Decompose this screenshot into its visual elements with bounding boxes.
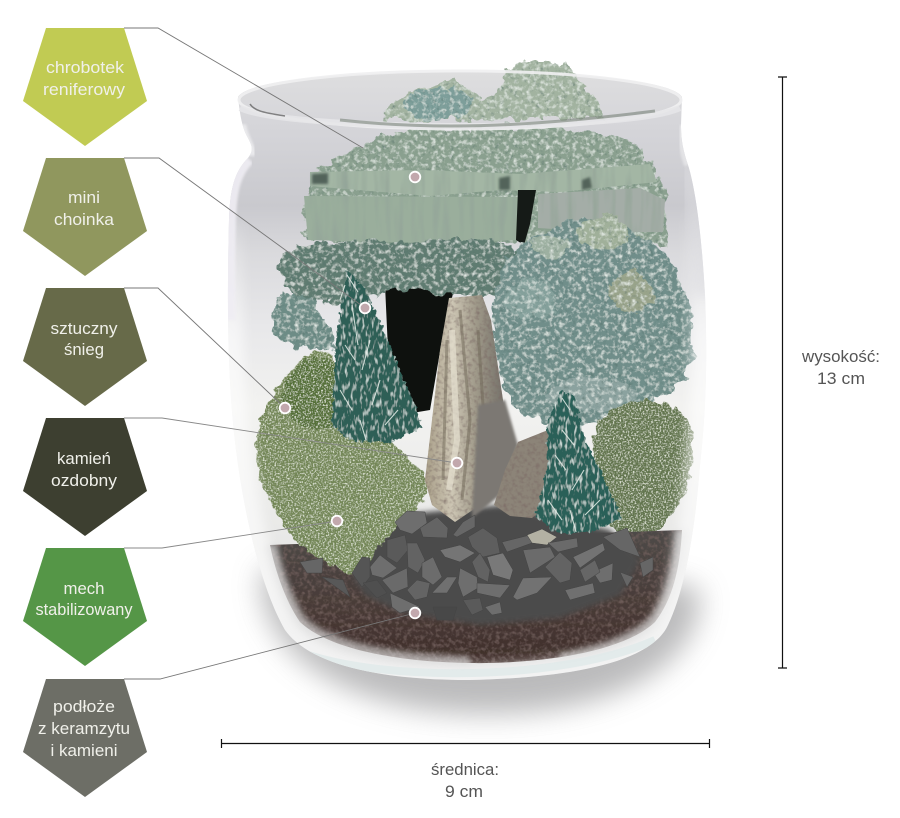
stone side shadow bbox=[472, 400, 518, 518]
label: sztuczny snieg: sztuczny bbox=[50, 319, 118, 338]
label: mini choinka bbox=[23, 158, 147, 276]
glass rim highlights bbox=[239, 71, 681, 129]
width label: średnica: bbox=[431, 760, 499, 779]
label: sztuczny snieg: śnieg bbox=[64, 340, 104, 359]
dark cavity bbox=[385, 285, 455, 415]
left neck strip bbox=[228, 158, 252, 276]
left lichen branch bbox=[273, 291, 338, 352]
label: podloze z keramzytu i kamieni: z keramzytu bbox=[38, 719, 130, 738]
label: podloze z keramzytu i kamieni bbox=[23, 679, 147, 797]
label: mech stabilizowany: mech bbox=[64, 579, 104, 598]
decorative stone bbox=[425, 295, 503, 522]
label: kamien ozdobny: kamień bbox=[57, 449, 111, 468]
height label bbox=[801, 347, 880, 388]
label: podloze z keramzytu i kamieni: i kamieni bbox=[50, 741, 118, 760]
marker dots bbox=[280, 172, 462, 618]
height label: wysokość: bbox=[801, 347, 880, 366]
label: chrobotek reniferowy bbox=[23, 28, 147, 146]
terrarium contents clipped to jar bbox=[228, 125, 706, 680]
left bottle-brush tree bbox=[332, 270, 422, 443]
label: kamien ozdobny: ozdobny bbox=[51, 471, 118, 490]
leader line: chrobotek reniferowy bbox=[124, 28, 363, 148]
leader line: podloze bbox=[124, 613, 415, 679]
width dimension line bbox=[222, 739, 710, 748]
left neck highlight bbox=[241, 125, 252, 156]
leader line: sztuczny snieg bbox=[124, 288, 285, 408]
label: chrobotek reniferowy: chrobotek bbox=[46, 58, 125, 77]
left moss mound bbox=[256, 350, 430, 575]
width label: 9 cm bbox=[445, 782, 483, 801]
height label: 13 cm bbox=[817, 369, 865, 388]
leader line: mech stabilizowany bbox=[124, 521, 337, 548]
refracted lower lichen band bbox=[304, 196, 520, 243]
label: mech stabilizowany bbox=[23, 548, 147, 666]
white haze at glass edges bbox=[228, 276, 706, 680]
leader line: mini choinka bbox=[124, 158, 365, 308]
label: kamien ozdobny bbox=[23, 418, 147, 536]
right moss mound bbox=[593, 400, 693, 537]
label: mini choinka: mini bbox=[68, 188, 100, 207]
dark notches in band bbox=[312, 173, 592, 190]
label: mech stabilizowany: stabilizowany bbox=[36, 600, 133, 619]
soil edge haze bbox=[270, 530, 682, 663]
height dimension line bbox=[778, 77, 787, 668]
right neck haze bbox=[681, 125, 688, 165]
jar drop shadow bbox=[261, 566, 700, 714]
tree snow streaks bbox=[340, 275, 600, 532]
lichen above the rim bbox=[382, 60, 608, 120]
soil layer bbox=[270, 530, 682, 663]
label: podloze z keramzytu i kamieni: podłoże bbox=[53, 697, 115, 716]
dark rock backing bbox=[352, 505, 640, 625]
width label bbox=[431, 760, 499, 801]
leader line: kamien ozdobny bbox=[124, 418, 457, 463]
dark gap in lichen bbox=[516, 190, 536, 245]
second stone bbox=[494, 430, 552, 518]
right bottle-brush tree bbox=[535, 390, 622, 534]
label: mini choinka: choinka bbox=[54, 210, 115, 229]
upper right haze bbox=[687, 181, 704, 288]
photo: glass terrarium jar bbox=[228, 60, 706, 714]
rock pile bbox=[300, 511, 653, 620]
label: sztuczny snieg bbox=[23, 288, 147, 406]
middle lichen canopy bbox=[278, 240, 526, 303]
base glass bbox=[300, 640, 655, 673]
glass jar body bbox=[228, 72, 706, 680]
reflected lichen band bbox=[310, 164, 657, 196]
right lichen mass bbox=[492, 214, 693, 424]
upper lichen canopy bbox=[303, 127, 669, 245]
label: chrobotek reniferowy: reniferowy bbox=[43, 80, 126, 99]
